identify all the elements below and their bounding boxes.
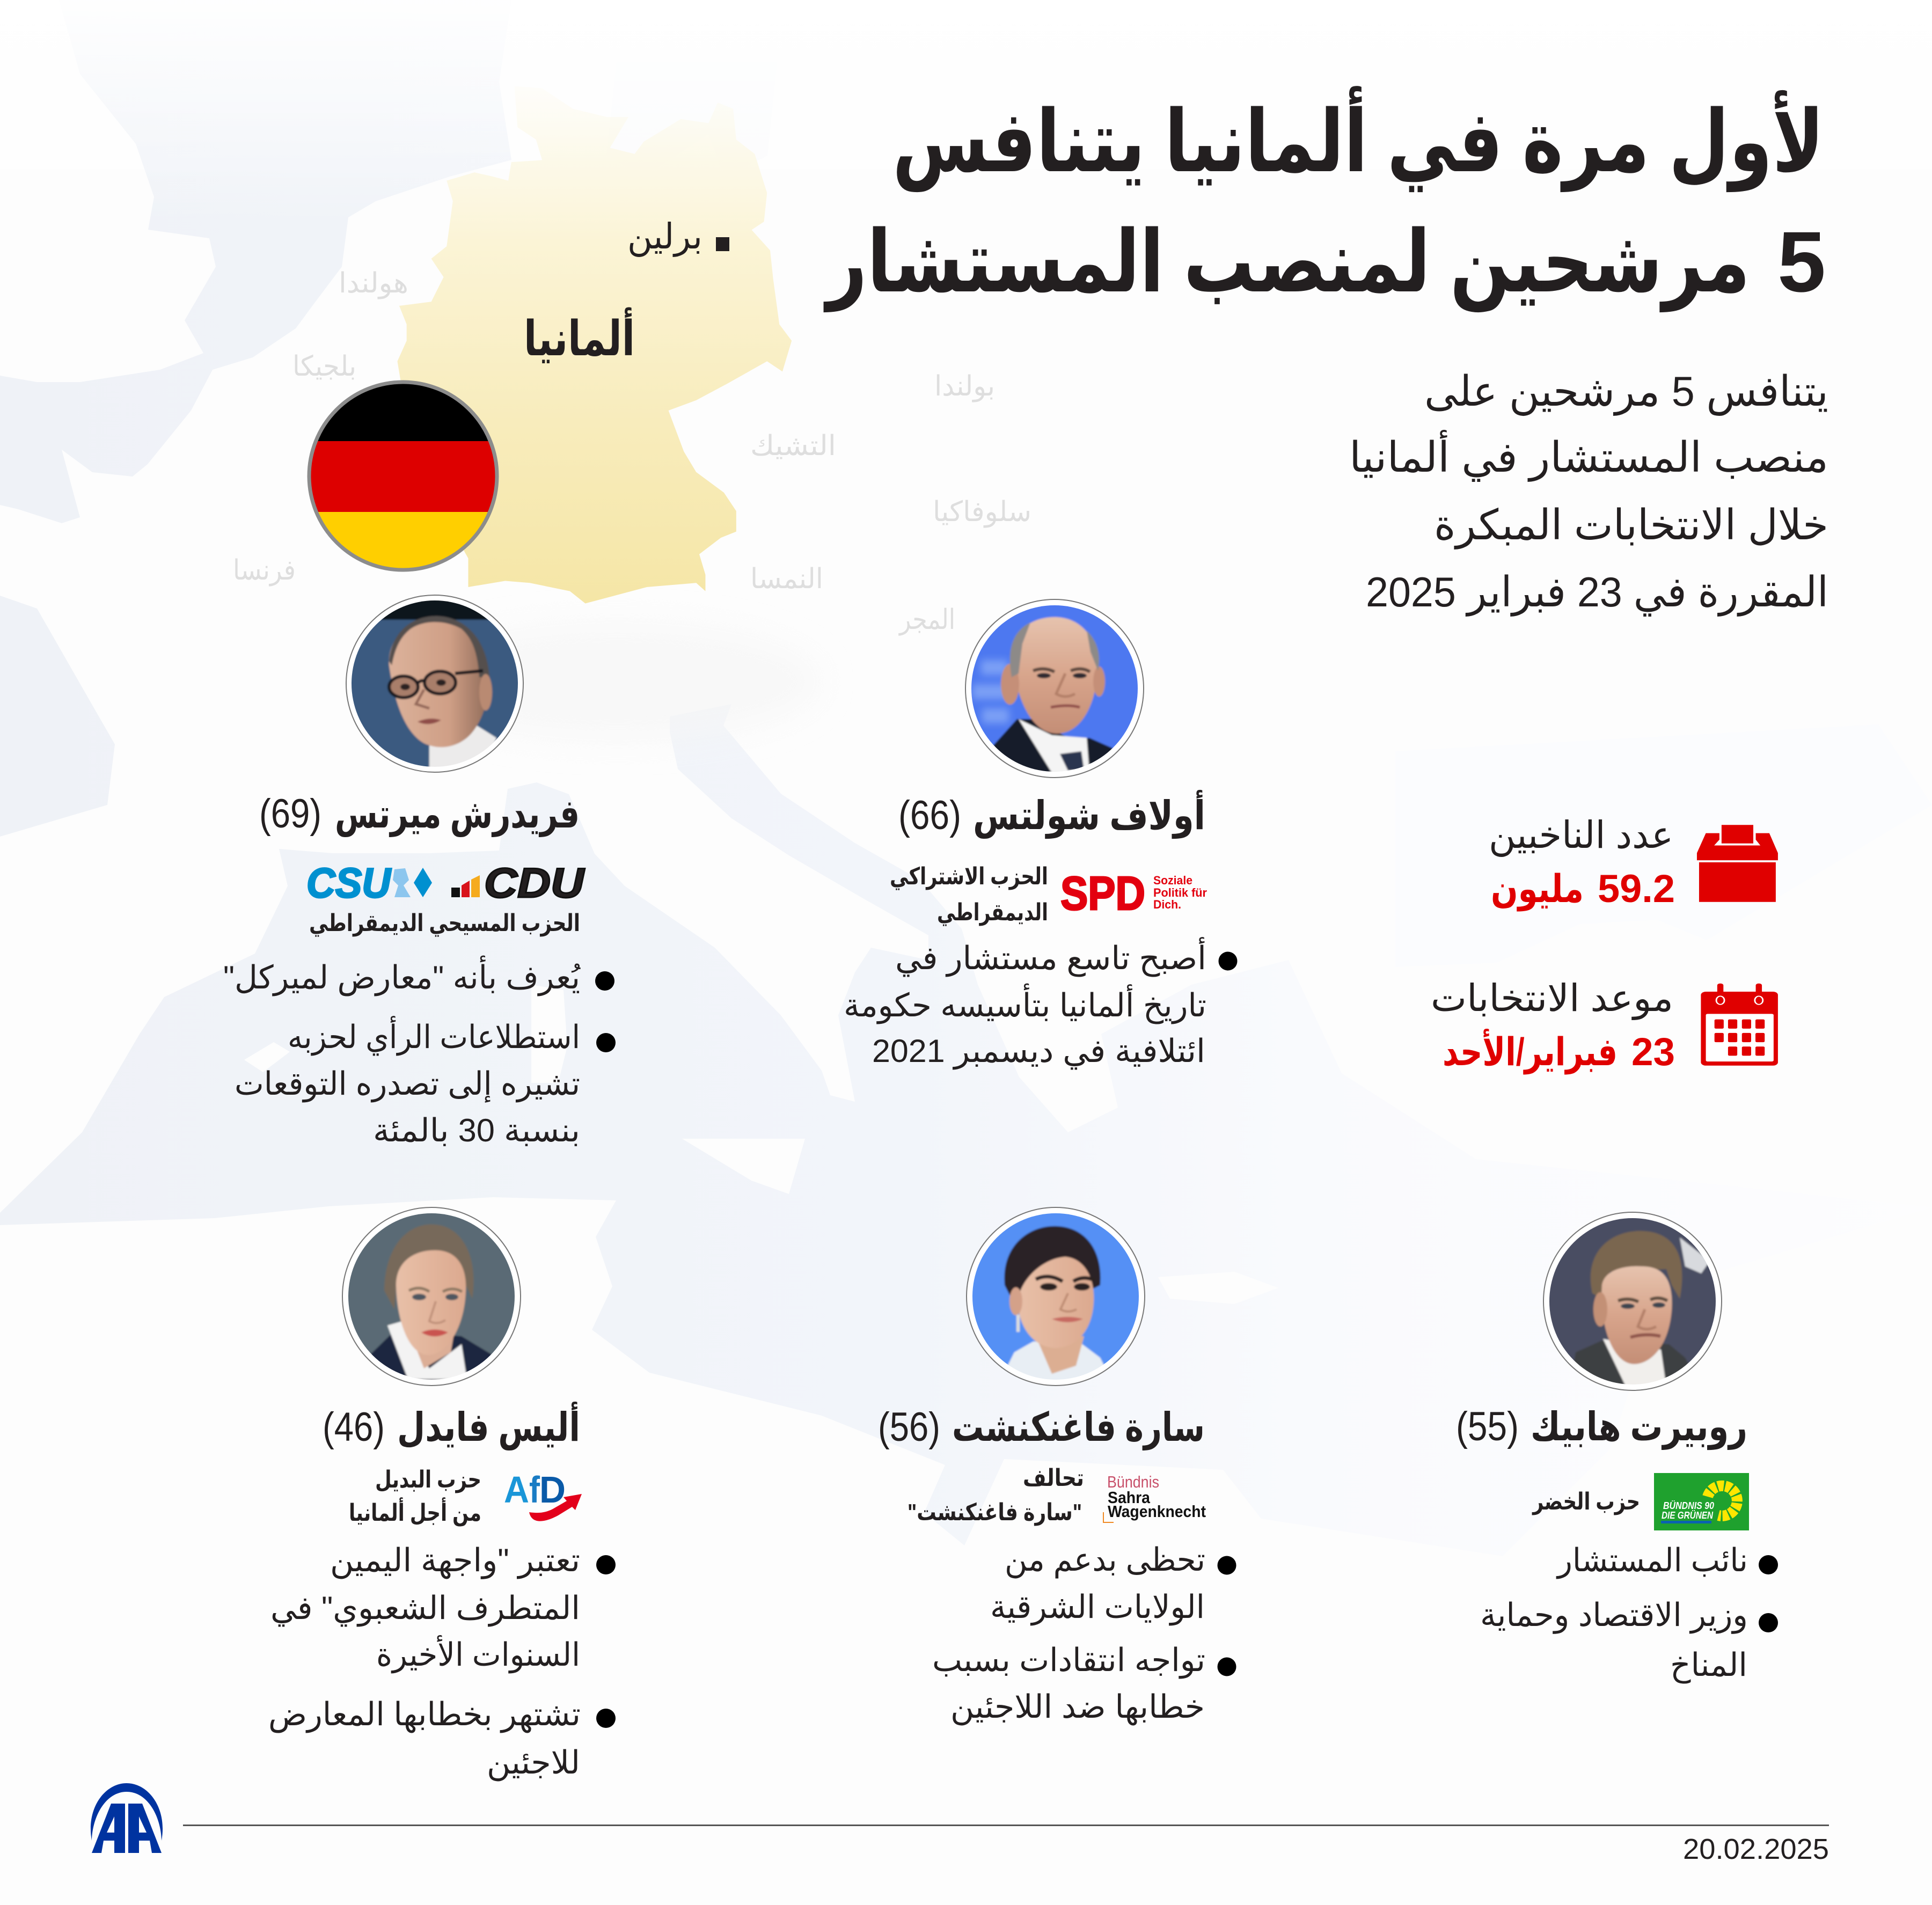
logo: SPD: SPD [1060, 867, 1145, 920]
party label [349, 1467, 481, 1527]
logo: SPD: Soziale [1153, 874, 1192, 887]
logo: BSW: Sahra [1108, 1488, 1151, 1507]
logo: BSW: Wagenknecht [1108, 1502, 1206, 1521]
map label: Berlin: برلين [627, 216, 702, 257]
bullet points: أصبح تاسع مستشار في [895, 937, 1206, 977]
bullet points: الولايات الشرقية [990, 1589, 1205, 1626]
party label: حزب البديل [375, 1467, 481, 1493]
age: (66) [898, 793, 961, 838]
subtitle text: منصب المستشار في ألمانيا [1349, 430, 1828, 482]
logo: CSU: CSU [306, 859, 392, 906]
footer rule [183, 1825, 1829, 1826]
bullet points: تشتهر بخطابها المعارض [268, 1696, 581, 1733]
party label: الحزب المسيحي الديمقراطي [309, 910, 580, 937]
party label: الديمقراطي [937, 899, 1048, 926]
stat: election date [1431, 977, 1778, 1075]
portrait: Scholz [965, 599, 1144, 778]
stat: number of voters [1489, 814, 1778, 912]
logo: BSW [1103, 1472, 1206, 1522]
party label [908, 1465, 1084, 1526]
bullet points [223, 955, 616, 1148]
stat: number of voters: 59.2 [1598, 867, 1675, 911]
bullet points: ائتلافية في ديسمبر 2021 [872, 1033, 1205, 1070]
icon: German flag [306, 376, 500, 576]
panel: Friedrich Merz [223, 595, 616, 1148]
bullet points [844, 937, 1238, 1070]
stat: election date: فبراير/الأحد [1443, 1028, 1618, 1075]
bullet points: تاريخ ألمانيا بتأسيسه حكومة [844, 983, 1206, 1024]
bullet points [1480, 1542, 1778, 1684]
bullet points: المتطرف الشعبوي" في [270, 1590, 580, 1627]
panel: Olaf Scholz [844, 599, 1238, 1070]
portrait: Merz [343, 595, 526, 773]
logo: AfD: A [504, 1469, 529, 1511]
logo: Greens: DIE GRÜNEN [1662, 1510, 1714, 1521]
map labels: neighbouring countries: النمسا [750, 563, 823, 595]
title [823, 86, 1826, 312]
portrait: Habeck [1543, 1212, 1722, 1390]
portrait: Weidel [342, 1207, 521, 1386]
panel: Alice Weidel [268, 1207, 616, 1782]
title: مرشحين لمنصب المستشار [823, 214, 1750, 312]
subtitle text: يتنافس 5 مرشحين على [1424, 368, 1828, 416]
logo: SPD: Politik für [1153, 886, 1207, 899]
bullet points: تشيره إلى تصدره التوقعات [235, 1066, 580, 1103]
bullet points [932, 1542, 1236, 1726]
name: روبيرت هابيك [1531, 1404, 1747, 1450]
logo: SPD [1060, 867, 1207, 920]
party label: الحزب الاشتراكي [890, 863, 1048, 890]
name: سارة فاغنكنشت [952, 1405, 1205, 1450]
icon: ballot box [1697, 825, 1778, 902]
name: فريدرش ميرتس [335, 792, 580, 837]
date: 20.02.2025 [1683, 1833, 1829, 1865]
bullet points [268, 1542, 616, 1782]
logo: AfD [504, 1469, 582, 1521]
map labels: neighbouring countries: بولندا [934, 371, 995, 402]
portrait: Wagenknecht [966, 1207, 1146, 1387]
party label: "سارة فاغنكنشت" [908, 1499, 1082, 1526]
logo: Anadolu Agency [91, 1783, 163, 1853]
map: Germany [397, 86, 792, 604]
bullet points: بنسبة 30 بالمئة [373, 1112, 580, 1148]
party label: من أجل ألمانيا [349, 1497, 481, 1527]
panel: Sahra Wagenknecht [878, 1207, 1236, 1726]
age: (46) [323, 1404, 385, 1450]
subtitle text [1349, 368, 1828, 617]
bullet points: يُعرف بأنه "معارض لميركل" [223, 955, 581, 997]
party label: حزب الخضر [1532, 1489, 1640, 1515]
map labels: neighbouring countries: هولندا [339, 268, 408, 299]
map labels: neighbouring countries: فرنسا [233, 555, 296, 587]
logo: SPD: Dich. [1153, 898, 1181, 911]
map labels: neighbouring countries: المجر [898, 604, 955, 636]
map labels: neighbouring countries: بلجيكا [292, 351, 356, 382]
age: (56) [878, 1404, 940, 1450]
logo: BSW: Bündnis [1107, 1472, 1159, 1491]
map labels: neighbouring countries [233, 268, 1031, 636]
party label: تحالف [1023, 1465, 1084, 1491]
stat: election date: 23 [1631, 1030, 1675, 1074]
logo: Greens: BÜNDNIS 90 [1663, 1500, 1714, 1511]
bullet points: تحظى بدعم من [1005, 1542, 1205, 1579]
logo: CDU [451, 859, 585, 906]
map labels: neighbouring countries: سلوفاكيا [933, 496, 1031, 528]
age: (69) [259, 791, 321, 837]
bullet points: نائب المستشار [1556, 1542, 1748, 1579]
stat: election date: موعد الانتخابات [1431, 977, 1673, 1020]
map labels: neighbouring countries: التشيك [750, 430, 836, 461]
bullet points: وزير الاقتصاد وحماية [1480, 1597, 1748, 1634]
logo: CDU: CDU [484, 859, 585, 906]
bullet points: المناخ [1670, 1647, 1747, 1684]
logo: AfD: D [539, 1469, 566, 1511]
subtitle text: خلال الانتخابات المبكرة [1434, 501, 1828, 550]
subtitle text: المقررة في 23 فبراير 2025 [1366, 568, 1828, 617]
logo: AfD: f [529, 1469, 540, 1511]
title: 5 [1777, 214, 1826, 310]
map label: Germany: ألمانيا [524, 307, 635, 366]
icon: calendar [1701, 984, 1778, 1066]
bullet points: تعتبر "واجهة اليمين [330, 1542, 580, 1579]
name: أليس فايدل [397, 1401, 580, 1450]
party label [890, 863, 1048, 926]
stat: number of voters: مليون [1491, 868, 1584, 912]
name: أولاف شولتس [973, 789, 1205, 839]
panel: Robert Habeck [1456, 1212, 1778, 1684]
bullet points: تواجه انتقادات بسبب [932, 1642, 1205, 1679]
stat: number of voters: عدد الناخبين [1489, 814, 1673, 857]
logo: Greens [1654, 1473, 1749, 1530]
age: (55) [1456, 1404, 1519, 1449]
bullet points: السنوات الأخيرة [376, 1635, 580, 1674]
bullet points: استطلاعات الرأي لحزبه [288, 1016, 580, 1056]
bullet points: خطابها ضد اللاجئين [950, 1689, 1205, 1726]
bullet points: للاجئين [487, 1745, 580, 1782]
